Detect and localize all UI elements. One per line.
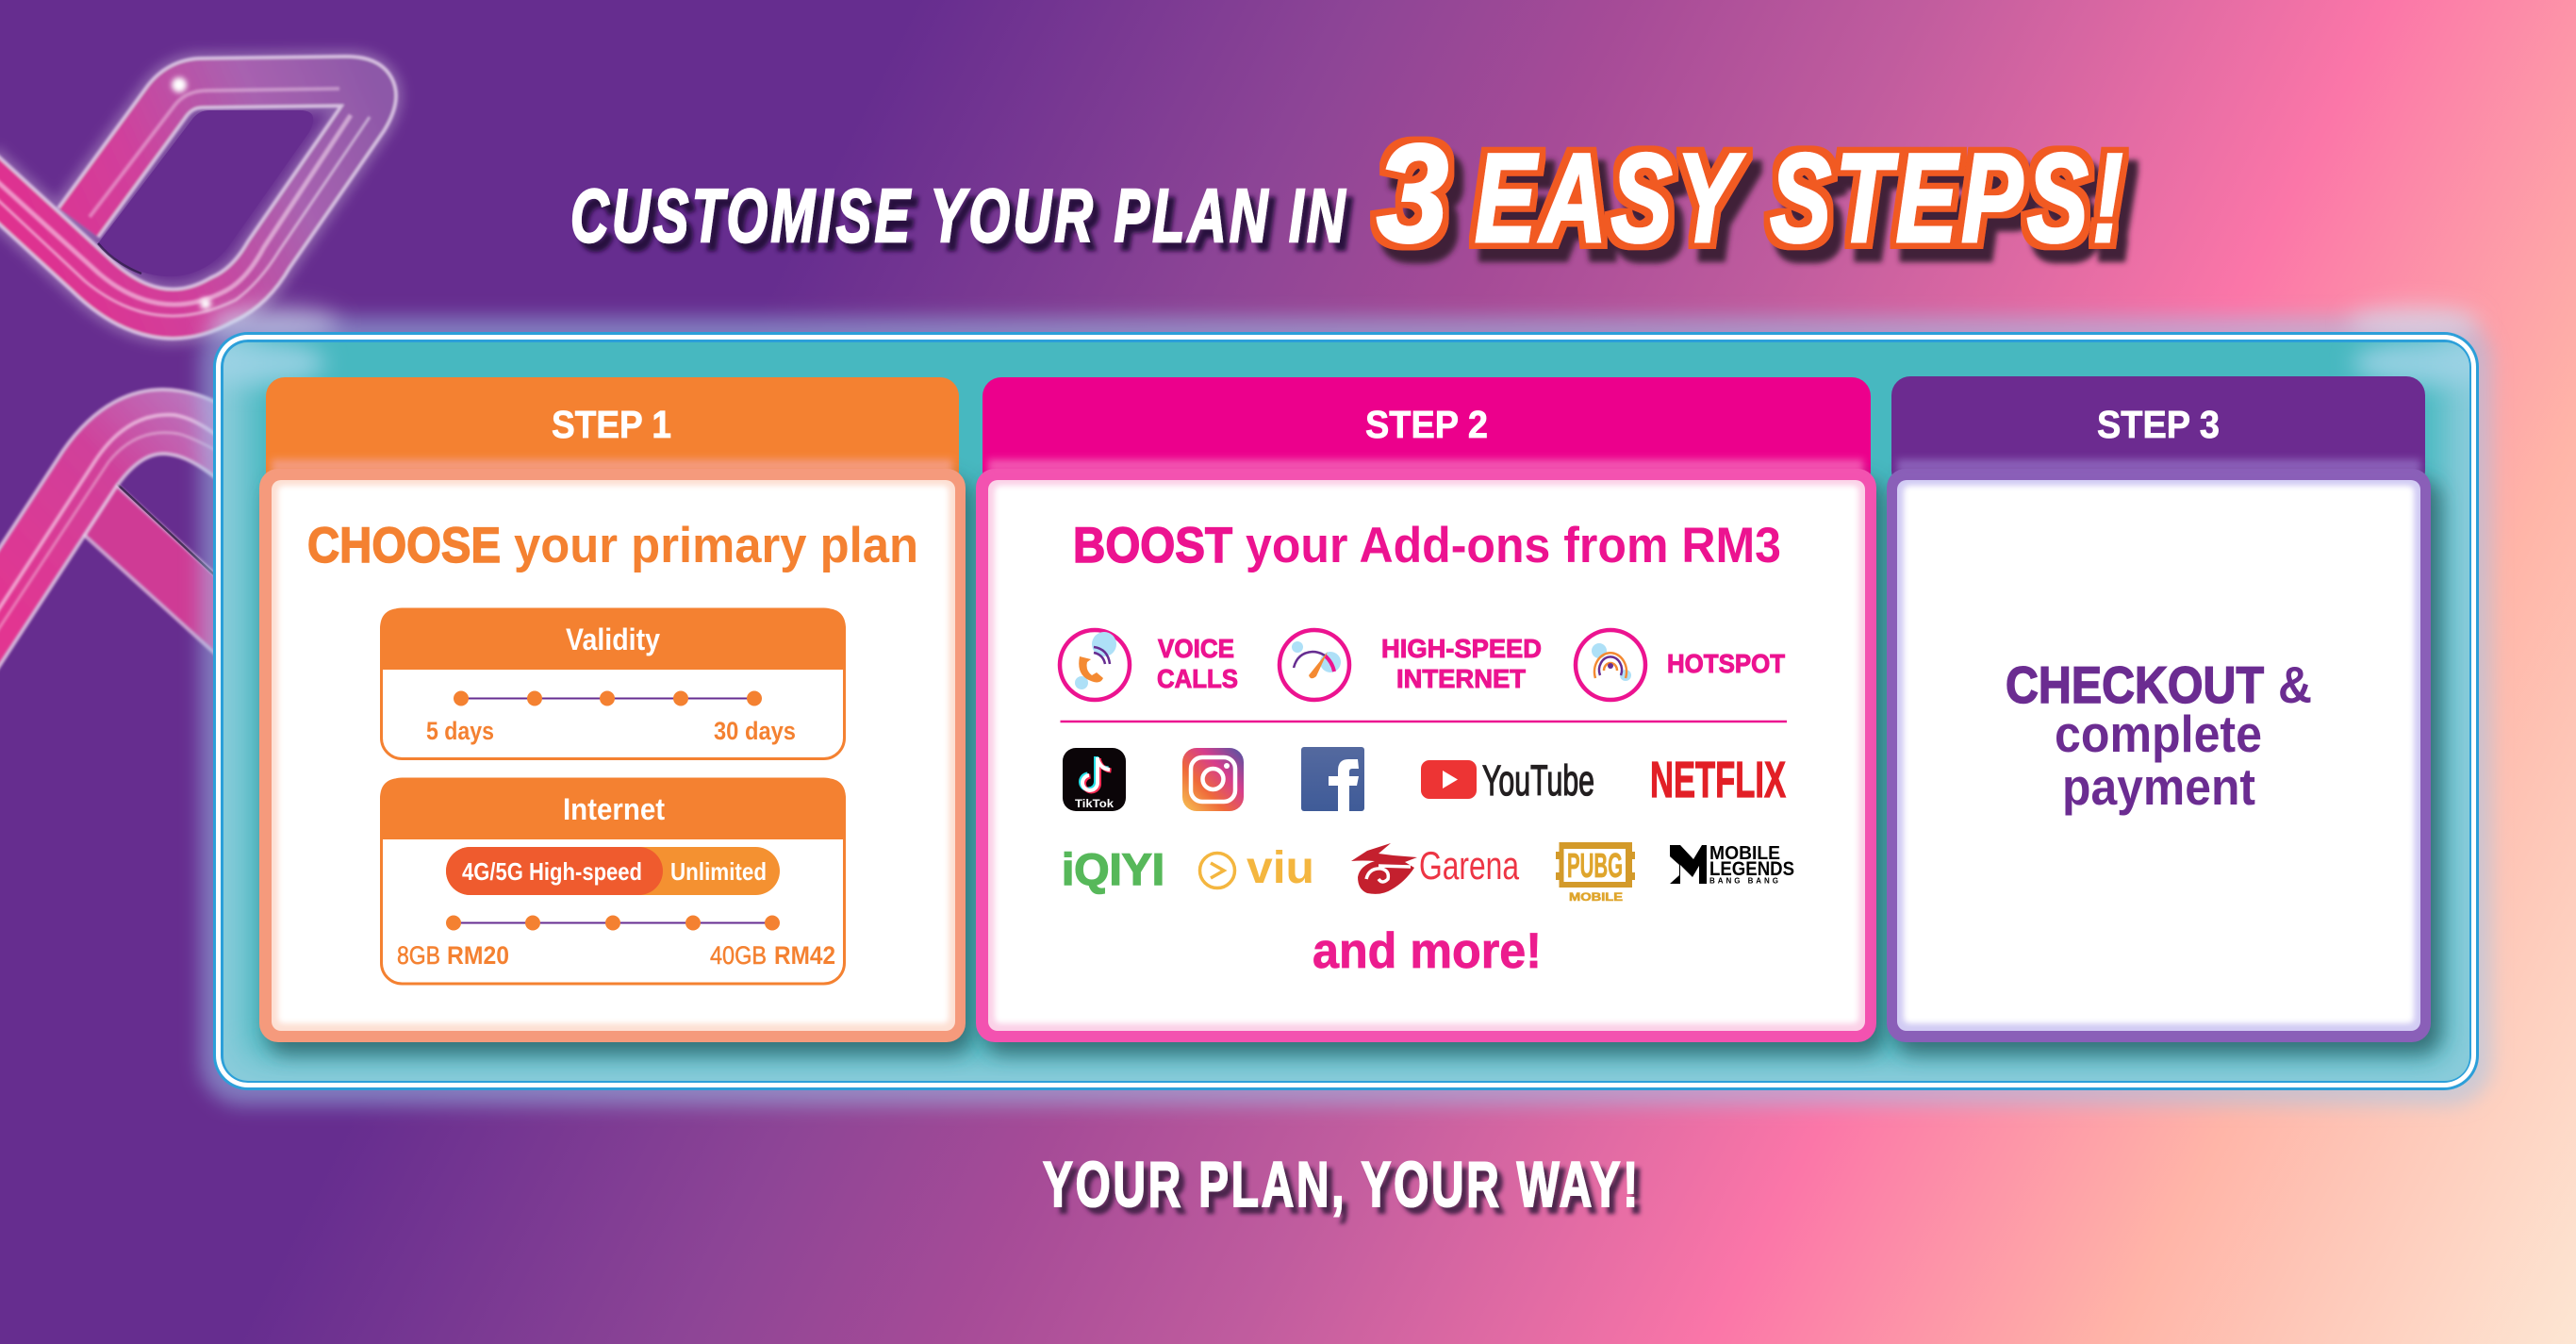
step 3 card bbox=[1887, 459, 2431, 1042]
text: checkout and complete payment bbox=[2006, 655, 2312, 816]
logo: mobile legends: MOBILE bbox=[1709, 843, 1780, 864]
step 2 header: STEP 2 bbox=[1365, 403, 1488, 446]
label: voice calls: VOICE bbox=[1158, 634, 1234, 663]
text: checkout and complete payment: CHECKOUT bbox=[2006, 655, 2264, 714]
logo: mobile legends: BANG BANG bbox=[1709, 877, 1778, 885]
text: checkout and complete payment: & bbox=[2278, 655, 2312, 714]
panel glow bbox=[200, 317, 2492, 1105]
step 2 card bbox=[976, 459, 1876, 1042]
tagline: your plan your way: YOUR PLAN, YOUR WAY! bbox=[1043, 1149, 1641, 1220]
logo: netflix: NETFLIX bbox=[1650, 752, 1786, 808]
logo: garena: Garena bbox=[1419, 843, 1519, 888]
step 3 header bbox=[1891, 376, 2425, 489]
panel: step 2 bbox=[976, 377, 1884, 1054]
ribbon: upper loop bbox=[0, 77, 372, 316]
internet box bbox=[380, 778, 846, 984]
text: checkout and complete payment: complete bbox=[2055, 705, 2262, 763]
logo: instagram bbox=[1182, 748, 1244, 811]
internet box: Internet bbox=[563, 792, 665, 826]
label: high-speed internet bbox=[1381, 634, 1542, 693]
step 1 header bbox=[266, 377, 959, 490]
label: high-speed internet: HIGH-SPEED bbox=[1381, 634, 1542, 663]
logo: pubg mobile: MOBILE bbox=[1569, 890, 1623, 904]
speed pill bbox=[446, 847, 780, 895]
heading: choose your primary plan bbox=[307, 518, 918, 573]
speed pill: 4G/5G High-speed bbox=[462, 857, 642, 886]
logo: viu: viu bbox=[1247, 843, 1314, 893]
title: 3 easy steps bbox=[1377, 116, 2127, 272]
internet box: 40GB bbox=[710, 941, 767, 970]
panel frame bbox=[213, 332, 2479, 1090]
step 1 header: STEP 1 bbox=[552, 403, 671, 446]
ribbon: lower X bbox=[0, 415, 245, 664]
text: and more: and more! bbox=[1313, 923, 1542, 979]
step 2 header bbox=[983, 377, 1871, 490]
heading: boost your add-ons: BOOST bbox=[1073, 518, 1232, 573]
label: hotspot: HOTSPOT bbox=[1667, 649, 1785, 678]
logo: mobile legends bbox=[1670, 843, 1794, 885]
logo: tiktok: TikTok bbox=[1075, 797, 1114, 810]
internet box: RM42 bbox=[774, 941, 835, 970]
logo: tiktok bbox=[1063, 748, 1126, 811]
text: checkout and complete payment: payment bbox=[2062, 757, 2255, 816]
icon: voice calls bbox=[1060, 630, 1130, 700]
logo: pubg mobile bbox=[1556, 842, 1635, 904]
heading: boost your add-ons: your Add-ons from RM3 bbox=[1246, 518, 1781, 573]
panel: step 1 bbox=[259, 377, 972, 1054]
decorative X ribbons bbox=[0, 77, 372, 664]
logo: mobile legends: LEGENDS bbox=[1709, 858, 1794, 880]
heading: choose your primary plan: CHOOSE bbox=[307, 518, 501, 573]
step 1 card bbox=[259, 459, 966, 1042]
title: 3 easy steps: 3 bbox=[1377, 116, 1448, 272]
validity box bbox=[380, 608, 846, 758]
logo: youtube bbox=[1421, 756, 1594, 805]
speed pill: Unlimited bbox=[670, 857, 767, 886]
label: voice calls bbox=[1157, 634, 1238, 693]
step 3 header: STEP 3 bbox=[2097, 403, 2220, 446]
panel: step 3 bbox=[1887, 376, 2441, 1054]
heading: choose your primary plan: your primary plan bbox=[514, 518, 918, 573]
loop opening bbox=[98, 110, 313, 276]
title: customise your plan in: CUSTOMISE YOUR PLAN IN bbox=[570, 174, 1348, 257]
logo: viu bbox=[1199, 843, 1314, 893]
internet box: RM20 bbox=[447, 941, 509, 970]
main teal panel bbox=[184, 302, 2513, 1105]
title: 3 easy steps: EASY STEPS! bbox=[1475, 128, 2127, 269]
logo: facebook bbox=[1301, 747, 1364, 811]
validity box: 30 days bbox=[714, 717, 796, 745]
logo: garena bbox=[1351, 843, 1519, 894]
logo: pubg mobile: PUBG bbox=[1567, 846, 1623, 885]
label: voice calls: CALLS bbox=[1157, 664, 1238, 693]
icon: hotspot bbox=[1576, 630, 1645, 700]
logo: iqiyi: iQIYI bbox=[1062, 844, 1164, 894]
icon: high-speed internet bbox=[1280, 630, 1349, 700]
validity box: 5 days bbox=[426, 717, 494, 745]
label: high-speed internet: INTERNET bbox=[1396, 664, 1526, 693]
internet box: 8GB bbox=[397, 941, 440, 970]
logo: youtube: YouTube bbox=[1482, 756, 1594, 805]
validity box: Validity bbox=[566, 622, 660, 656]
